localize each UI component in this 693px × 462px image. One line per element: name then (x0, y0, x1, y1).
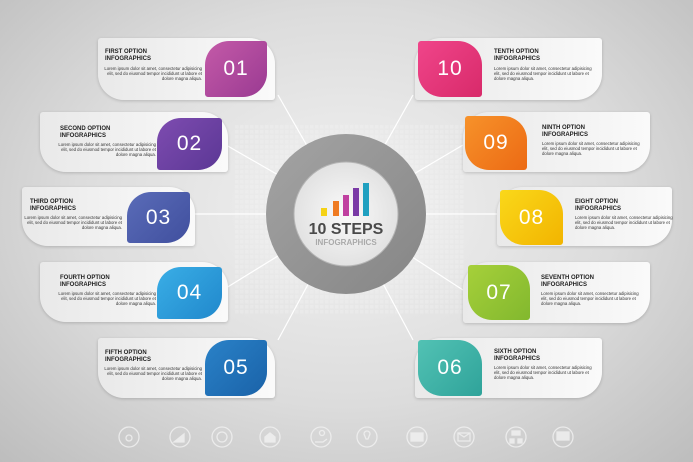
panel: step 03: THIRD OPTION (30, 199, 73, 205)
panel: step 07: Lorem ipsum dolor sit amet, consectetur adipisicing elit, sed do eiusmod tempor incididunt ut labore et dolore magna aliqua. (541, 291, 639, 306)
tile 05 (205, 340, 267, 396)
tile 10 (418, 41, 482, 97)
panel: step 06: INFOGRAPHICS (494, 356, 540, 362)
panel: step 10: INFOGRAPHICS (494, 56, 540, 62)
tile 04 (157, 267, 222, 319)
tile 07: 07 (486, 280, 512, 304)
panel: step 01: FIRST OPTION (105, 49, 147, 55)
tile 01 (205, 41, 267, 97)
panel: step 02 (40, 112, 228, 172)
tile 04: 04 (177, 281, 202, 304)
panel: step 03: Lorem ipsum dolor sit amet, consectetur adipisicing elit, sed do eiusmod tempor incididunt ut labore et dolore magna aliqua. (24, 215, 122, 230)
panel: step 07: INFOGRAPHICS (541, 282, 587, 288)
panel: step 05: Lorem ipsum dolor sit amet, consectetur adipisicing elit, sed do eiusmod tempor incididunt ut labore et dolore magna aliqua. (104, 366, 202, 381)
panel: step 03 (22, 187, 195, 246)
panel: step 04 (40, 262, 228, 322)
panel: step 08: Lorem ipsum dolor sit amet, consectetur adipisicing elit, sed do eiusmod tempor incididunt ut labore et dolore magna aliqua. (575, 215, 673, 230)
panel: step 09: NINTH OPTION (542, 125, 585, 131)
panel: step 10 (415, 38, 602, 100)
panel: step 04: FOURTH OPTION (60, 275, 110, 281)
tile 02: 02 (177, 132, 202, 155)
panel: step 09: INFOGRAPHICS (542, 132, 588, 138)
panel: step 09: Lorem ipsum dolor sit amet, consectetur adipisicing elit, sed do eiusmod tempor incididunt ut labore et dolore magna aliqua. (542, 141, 640, 156)
panel: step 02: SECOND OPTION (60, 126, 110, 132)
panel: step 06: Lorem ipsum dolor sit amet, consectetur adipisicing elit, sed do eiusmod tempor incididunt ut labore et dolore magna aliqua. (494, 365, 592, 380)
tile 03: 03 (146, 206, 171, 228)
panel: step 08 (497, 187, 672, 246)
tile 06 (418, 340, 482, 396)
logo text: 10 STEPS (309, 221, 384, 238)
panel: step 05: FIFTH OPTION (105, 350, 147, 356)
panel: step 02: INFOGRAPHICS (60, 133, 106, 139)
panel: step 05 (98, 338, 275, 398)
panel: step 06 (415, 338, 602, 398)
panel: step 05: INFOGRAPHICS (105, 357, 151, 363)
panel: step 10: Lorem ipsum dolor sit amet, consectetur adipisicing elit, sed do eiusmod tempor incididunt ut labore et dolore magna aliqua. (494, 66, 592, 81)
tile 10: 10 (437, 57, 463, 80)
panel: step 08: INFOGRAPHICS (575, 206, 621, 212)
tile 08: 08 (519, 206, 544, 228)
panel: step 03: INFOGRAPHICS (30, 206, 76, 212)
tile 09: 09 (483, 131, 509, 154)
panel: step 10: TENTH OPTION (494, 49, 539, 55)
tile 01: 01 (223, 57, 249, 80)
panel: step 01 (98, 38, 275, 100)
bottom icon row (119, 427, 573, 447)
panel: step 01: INFOGRAPHICS (105, 56, 151, 62)
tile 02 (157, 118, 222, 170)
panel: step 02: Lorem ipsum dolor sit amet, consectetur adipisicing elit, sed do eiusmod tempor incididunt ut labore et dolore magna aliqua. (58, 142, 156, 157)
panel: step 06: SIXTH OPTION (494, 349, 536, 355)
center ring with logo: INFOGRAPHICS (315, 238, 377, 247)
tile 05: 05 (223, 356, 249, 379)
tile 06: 06 (437, 356, 463, 379)
panel: step 07 (463, 262, 650, 323)
tile 09 (465, 116, 527, 170)
tile 08 (500, 190, 563, 245)
logo bars (321, 183, 369, 216)
panel: step 09 (463, 112, 650, 172)
panel: step 07: SEVENTH OPTION (541, 275, 594, 281)
tile 07 (468, 265, 530, 320)
tile 03 (127, 192, 190, 243)
panel: step 04: INFOGRAPHICS (60, 282, 106, 288)
panel: step 01: Lorem ipsum dolor sit amet, consectetur adipisicing elit, sed do eiusmod tempor incididunt ut labore et dolore magna aliqua. (104, 66, 202, 81)
panel: step 08: EIGHT OPTION (575, 199, 618, 205)
panel: step 04: Lorem ipsum dolor sit amet, consectetur adipisicing elit, sed do eiusmod tempor incididunt ut labore et dolore magna aliqua. (58, 291, 156, 306)
